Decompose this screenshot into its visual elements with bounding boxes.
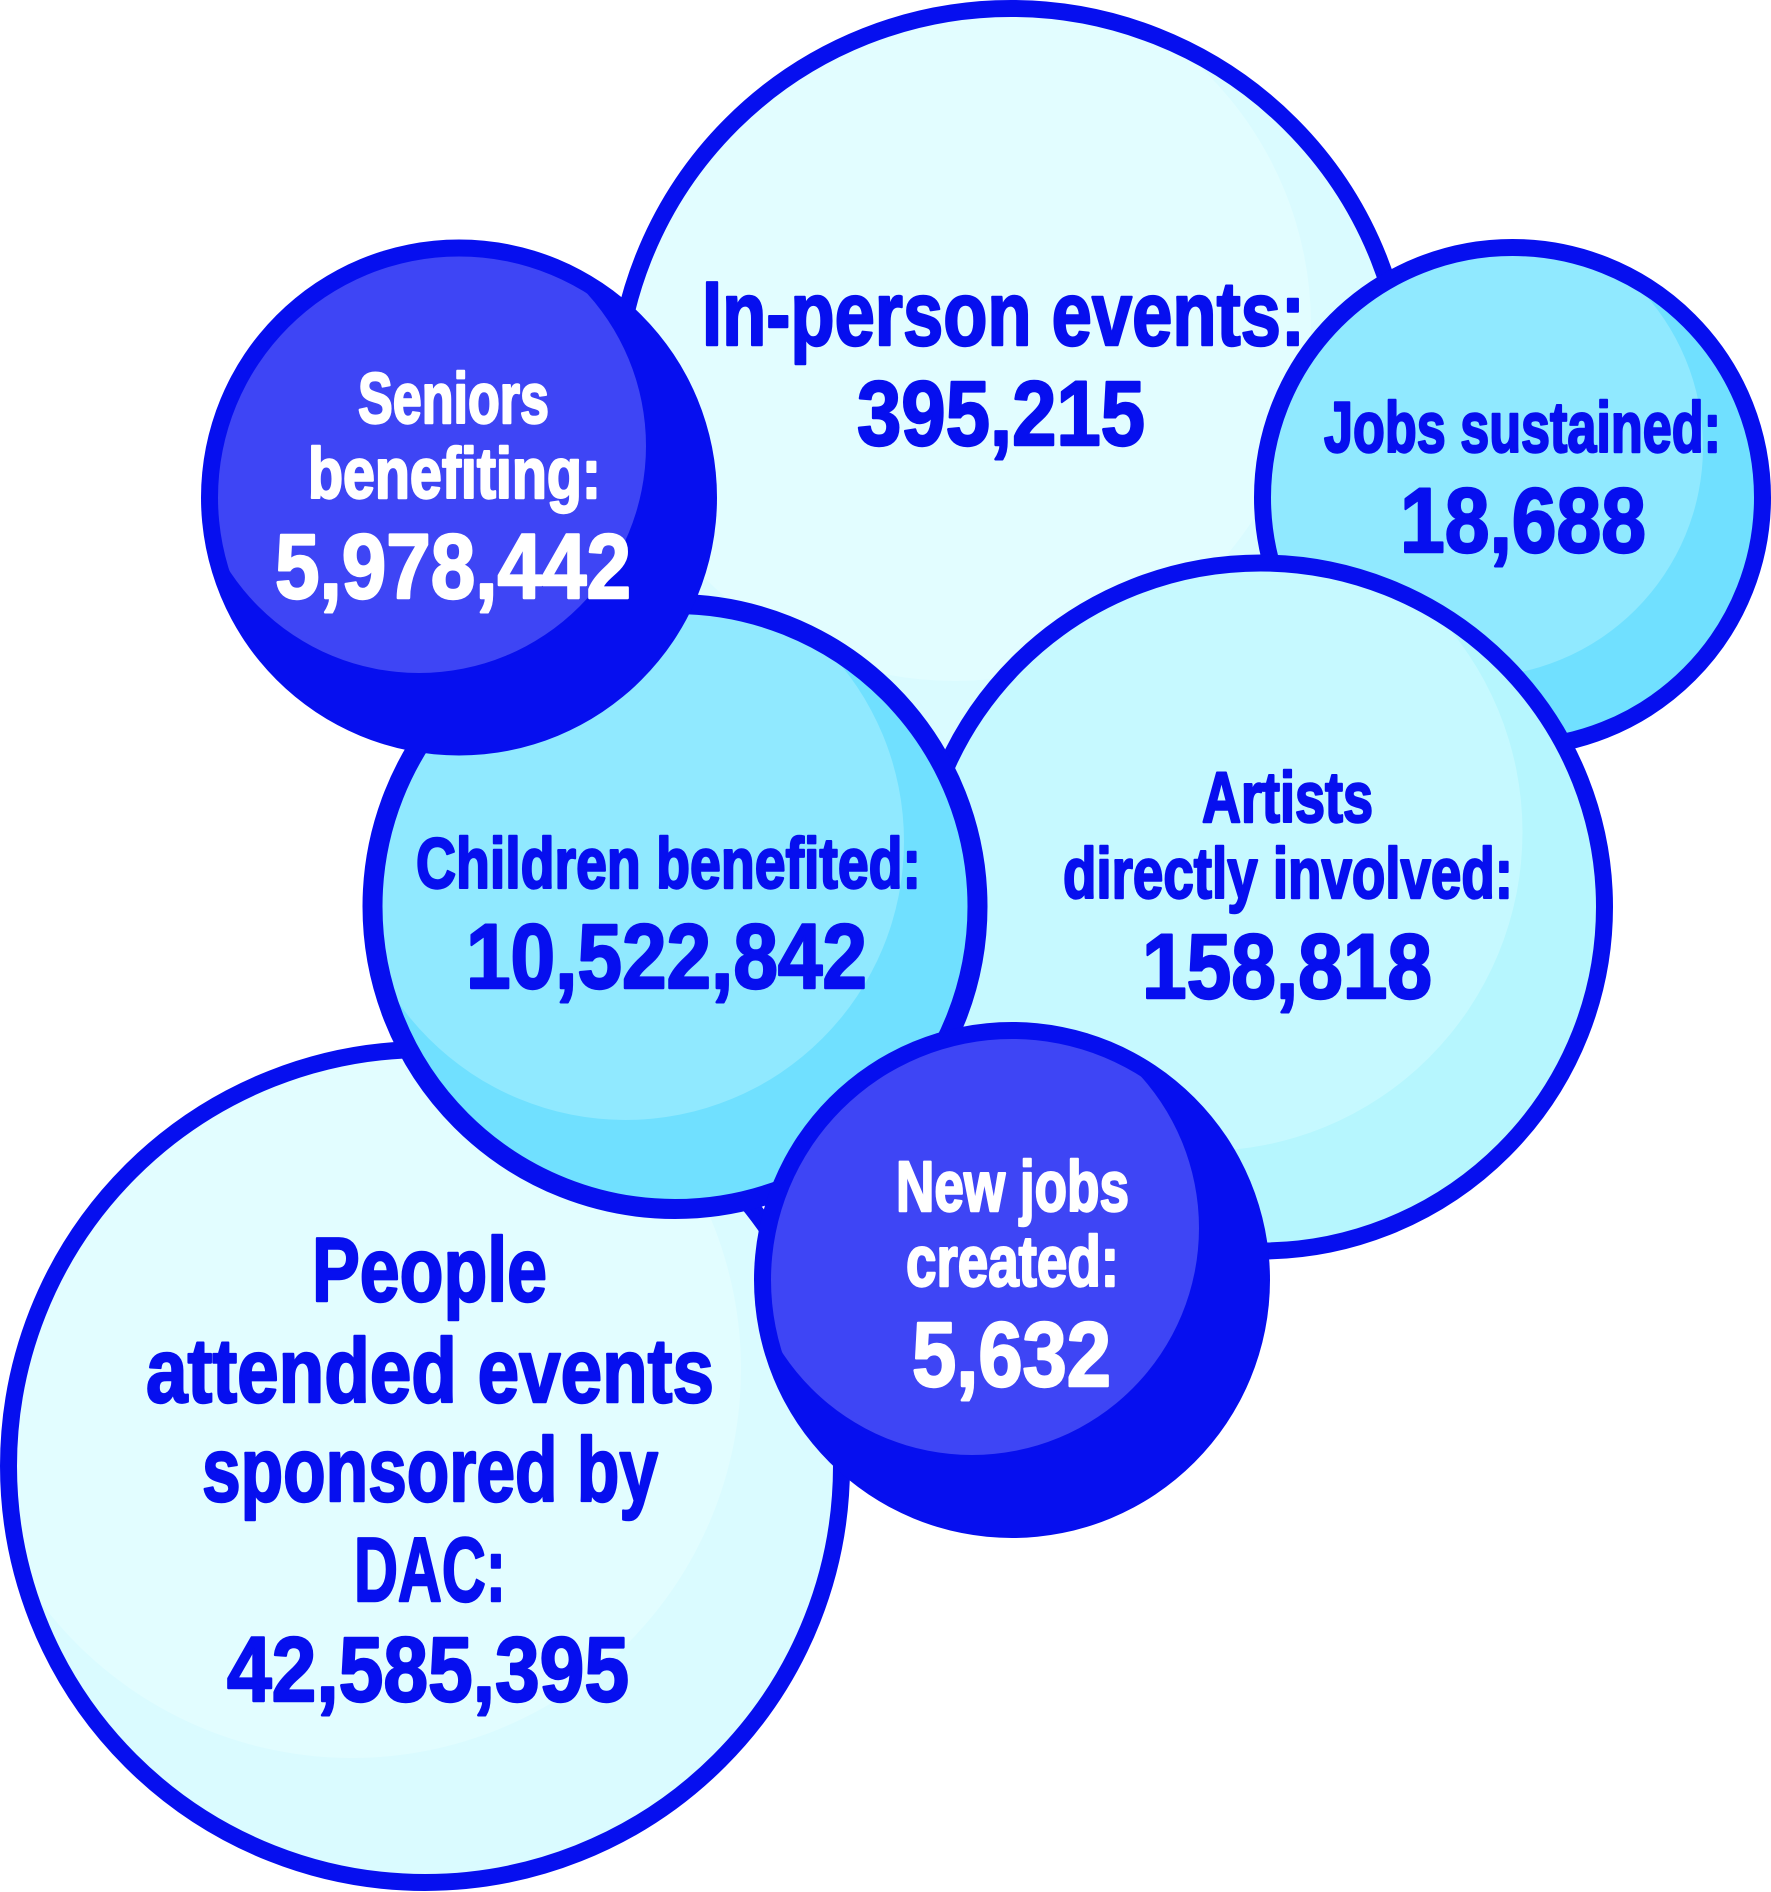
- panel: new jobs created bubble: [745, 1001, 1270, 1538]
- text: jobs sustained: [1324, 389, 1721, 572]
- text: in-person events: [702, 264, 1305, 465]
- text: artists directly involved: directly involved:: [1063, 835, 1513, 914]
- text: new jobs created: [896, 1148, 1129, 1406]
- text: new jobs created: created:: [906, 1223, 1119, 1302]
- panel: children benefited bubble: [347, 563, 978, 1209]
- text: artists directly involved: 158,818: [1142, 916, 1432, 1018]
- text: seniors benefiting: [275, 360, 631, 618]
- panel: people attended events bubble: [0, 980, 842, 1882]
- text: children benefited: Children benefited:: [416, 825, 921, 904]
- panel: artists directly involved bubble: [945, 554, 1613, 1260]
- text: in-person events: In-person events:: [702, 264, 1305, 365]
- text: in-person events: 395,215: [857, 363, 1145, 465]
- text: seniors benefiting: 5,978,442: [275, 516, 631, 618]
- text: people attended events: sponsored by: [202, 1420, 658, 1521]
- text: people attended events: [146, 1220, 714, 1721]
- text: people attended events: attended events: [146, 1321, 714, 1422]
- text: people attended events: People: [312, 1220, 547, 1321]
- text: artists directly involved: Artists: [1202, 759, 1373, 838]
- text: people attended events: 42,585,395: [227, 1619, 629, 1721]
- text: jobs sustained: 18,688: [1400, 470, 1646, 572]
- text: people attended events: DAC:: [354, 1520, 506, 1621]
- text: artists directly involved: [1063, 759, 1513, 1018]
- panel: seniors benefiting bubble: [192, 219, 717, 756]
- panel: in-person events bubble: [622, 0, 1392, 750]
- panel: jobs sustained bubble: [1243, 217, 1762, 748]
- text: seniors benefiting: benefiting:: [308, 435, 601, 514]
- text: children benefited: 10,522,842: [466, 906, 867, 1008]
- text: children benefited: [416, 825, 921, 1008]
- text: seniors benefiting: Seniors: [358, 360, 549, 439]
- text: new jobs created: 5,632: [912, 1304, 1111, 1406]
- text: new jobs created: New jobs: [896, 1148, 1129, 1227]
